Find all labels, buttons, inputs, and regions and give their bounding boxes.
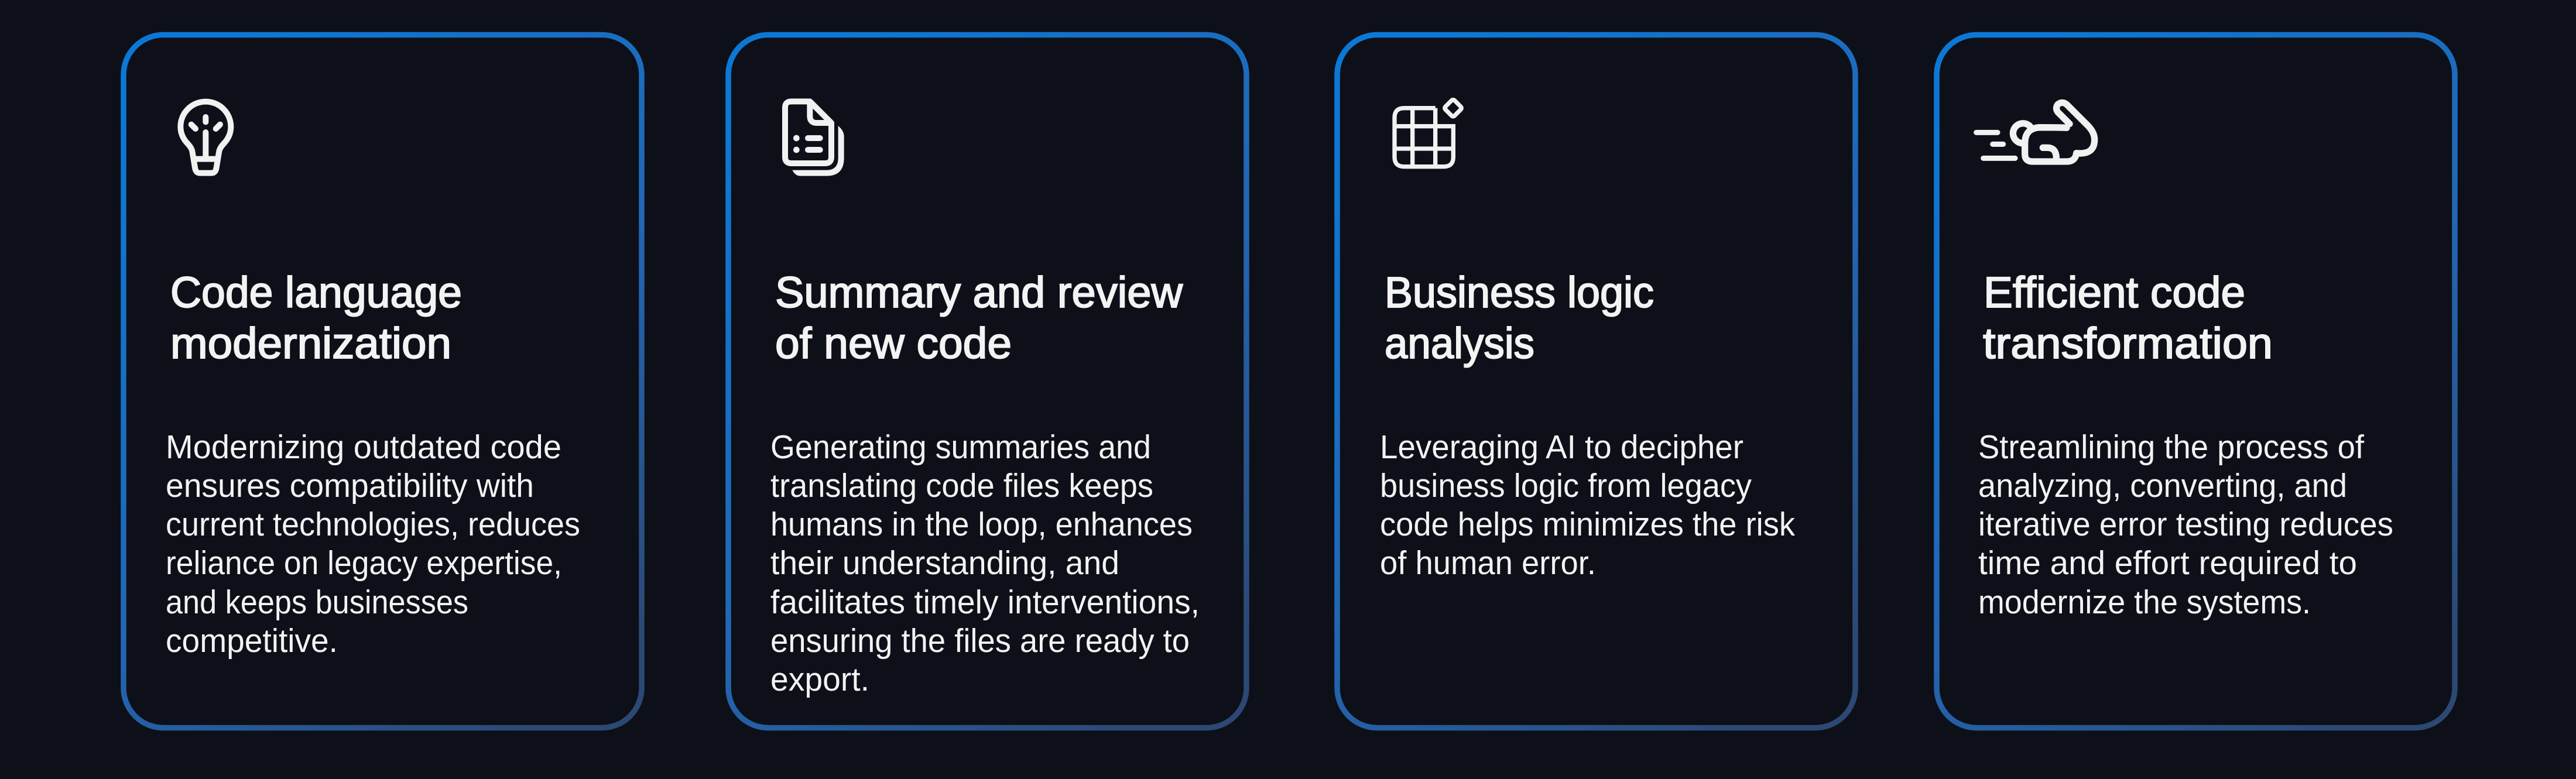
heading: Summary and review — [775, 268, 1183, 317]
body text: Streamlining the process of — [1978, 428, 2364, 466]
body text: ensures compatibility with — [166, 467, 534, 505]
body text: and keeps businesses — [166, 584, 468, 621]
body text: Generating summaries and — [770, 428, 1151, 466]
body text: of human error. — [1380, 544, 1596, 582]
heading: Business logic — [1385, 268, 1654, 317]
panel: summary and review of new code — [728, 35, 1246, 728]
card border — [1937, 35, 2455, 728]
body text: export. — [770, 661, 869, 698]
body text: Modernizing outdated code — [166, 428, 561, 466]
card border — [124, 35, 642, 728]
body text: their understanding, and — [770, 544, 1119, 582]
heading: modernization — [170, 319, 451, 368]
card border — [728, 35, 1246, 728]
body text: reliance on legacy expertise, — [166, 544, 562, 582]
heading: analysis — [1385, 319, 1534, 368]
heading: Code language — [170, 268, 462, 317]
body text: modernize the systems. — [1978, 584, 2311, 621]
heading: of new code — [775, 319, 1012, 368]
body text: current technologies, reduces — [166, 506, 580, 543]
heading: transformation — [1983, 319, 2273, 368]
body text: ensuring the files are ready to — [770, 622, 1190, 660]
heading: Efficient code — [1984, 268, 2245, 317]
icon: stacked documents — [785, 101, 844, 176]
body text: translating code files keeps — [770, 467, 1153, 505]
panel: code language modernization — [124, 35, 642, 728]
body text: code helps minimizes the risk — [1380, 506, 1795, 543]
card border — [1337, 35, 1855, 728]
body text: Leveraging AI to decipher — [1380, 428, 1743, 466]
icon: light bulb — [180, 102, 231, 173]
body text: iterative error testing reduces — [1978, 506, 2393, 543]
panel: business logic analysis — [1337, 35, 1855, 728]
icon: running rabbit — [1976, 102, 2095, 162]
body text: competitive. — [166, 622, 338, 660]
body text: facilitates timely interventions, — [770, 584, 1200, 621]
body text: time and effort required to — [1978, 544, 2357, 582]
icon: grid with diamond — [1395, 99, 1462, 167]
body text: business logic from legacy — [1380, 467, 1752, 505]
panel: efficient code transformation — [1937, 35, 2455, 728]
body text: humans in the loop, enhances — [770, 506, 1193, 543]
body text: analyzing, converting, and — [1978, 467, 2347, 505]
